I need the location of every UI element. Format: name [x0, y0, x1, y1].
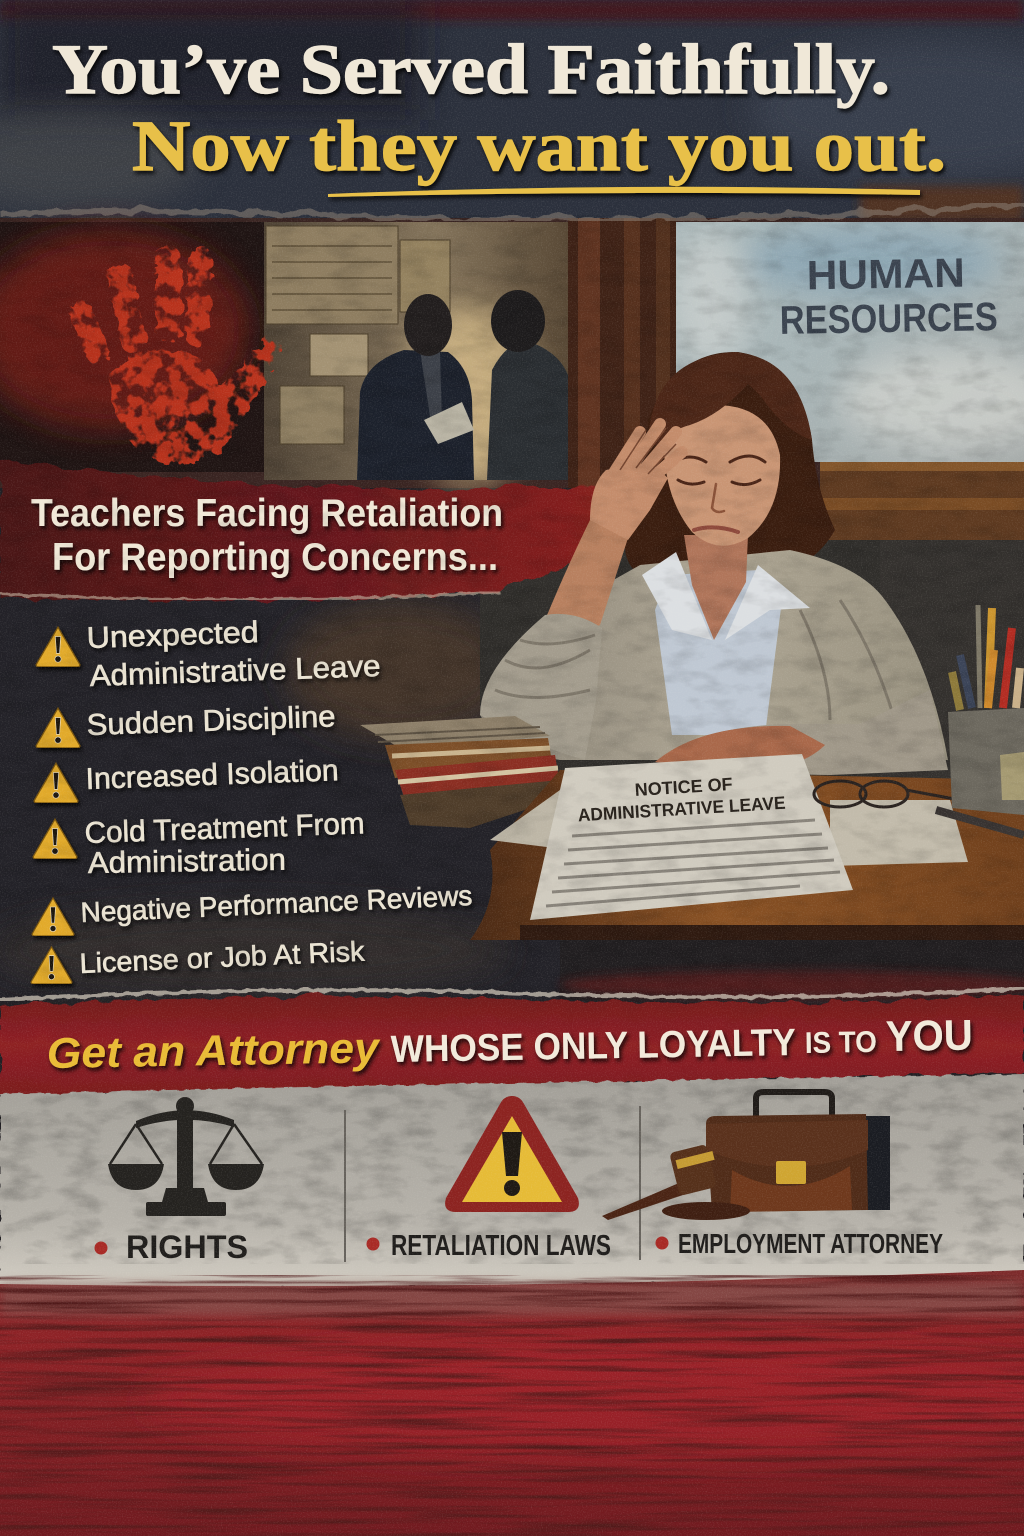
title underline [328, 187, 920, 197]
list item: cold treatment from administration: Cold Treatment From [84, 807, 365, 850]
heading: teachers facing retaliation: Teachers Facing Retaliation [31, 492, 503, 535]
heading: teachers facing retaliation: For Reporting Concerns... [52, 536, 498, 579]
door frame [568, 218, 676, 488]
face [664, 405, 780, 546]
warning list [31, 616, 473, 984]
illustration: teacher at desk [360, 352, 1024, 940]
panel: red heading band [0, 460, 600, 601]
papers on desk [830, 800, 968, 866]
label: rights: RIGHTS [126, 1229, 248, 1265]
notice document: ADMINISTRATIVE LEAVE [577, 793, 786, 825]
list item: unexpected administrative leave: Administrative Leave [89, 650, 381, 693]
HR sign text: HUMAN [806, 250, 965, 298]
list item: negative performance reviews: Negative Performance Reviews [80, 880, 473, 928]
desk [470, 770, 1024, 940]
panel: attorney banner [0, 988, 1024, 1096]
heading: get an attorney: IS TO [805, 1026, 877, 1060]
heading: teachers facing retaliation [31, 492, 503, 579]
window glass [676, 222, 1024, 462]
label: employment attorney: EMPLOYMENT ATTORNEY [678, 1228, 943, 1259]
hair top [648, 352, 812, 445]
raised hand and arm [545, 424, 682, 631]
heading: get an attorney [46, 1011, 973, 1078]
neck [684, 535, 748, 640]
list item: unexpected administrative leave: Unexpected [86, 616, 259, 655]
papers on board [266, 226, 450, 444]
heading: get an attorney: Get an Attorney [46, 1024, 381, 1078]
icon: briefcase and gavel [602, 1092, 890, 1220]
red wall [0, 222, 270, 472]
list item: cold treatment from administration [33, 807, 365, 880]
silhouettes of two people [357, 290, 568, 480]
grain over picture [0, 215, 1024, 1000]
panel: red footer [0, 1270, 1024, 1536]
notice document: NOTICE OF [634, 774, 733, 800]
lower arm and hand [660, 690, 948, 775]
hair back [625, 352, 835, 575]
list item: cold treatment from administration: Administration [88, 844, 286, 880]
list item: unexpected administrative leave [36, 616, 381, 693]
HR sign text [779, 250, 998, 343]
list item: sudden discipline [36, 700, 336, 748]
torso cardigan [480, 550, 948, 760]
label: retaliation laws: RETALIATION LAWS [391, 1230, 611, 1262]
title [52, 31, 946, 197]
pencil cup [948, 605, 1024, 815]
notice document [530, 754, 853, 920]
icon: warning triangle [445, 1096, 579, 1212]
shirt [655, 570, 782, 735]
heading: get an attorney: WHOSE ONLY LOYALTY [390, 1022, 796, 1071]
bulletin board [264, 222, 572, 480]
title: You’ve Served Faithfully. [52, 31, 890, 109]
list item: increased isolation: Increased Isolation [85, 754, 339, 796]
panel: list background [0, 540, 1024, 1000]
list item: sudden discipline: Sudden Discipline [86, 700, 336, 742]
facial features [674, 456, 765, 532]
list item: license or job at risk: License or Job At Risk [79, 936, 366, 979]
torn edge under header [0, 204, 1024, 220]
panel: header [0, 0, 1024, 222]
panel: rights, laws, attorney strip [0, 1074, 1024, 1287]
icon: red handprint [66, 245, 282, 462]
wooden window sill [820, 462, 1024, 800]
icon: scales of justice [108, 1097, 264, 1216]
panel: office scene [0, 218, 1024, 800]
glasses and pen [814, 781, 1024, 835]
title: Now they want you out. [132, 106, 946, 186]
heading: get an attorney: YOU [885, 1011, 973, 1061]
left sleeve [480, 614, 602, 760]
stack of books [360, 716, 560, 828]
